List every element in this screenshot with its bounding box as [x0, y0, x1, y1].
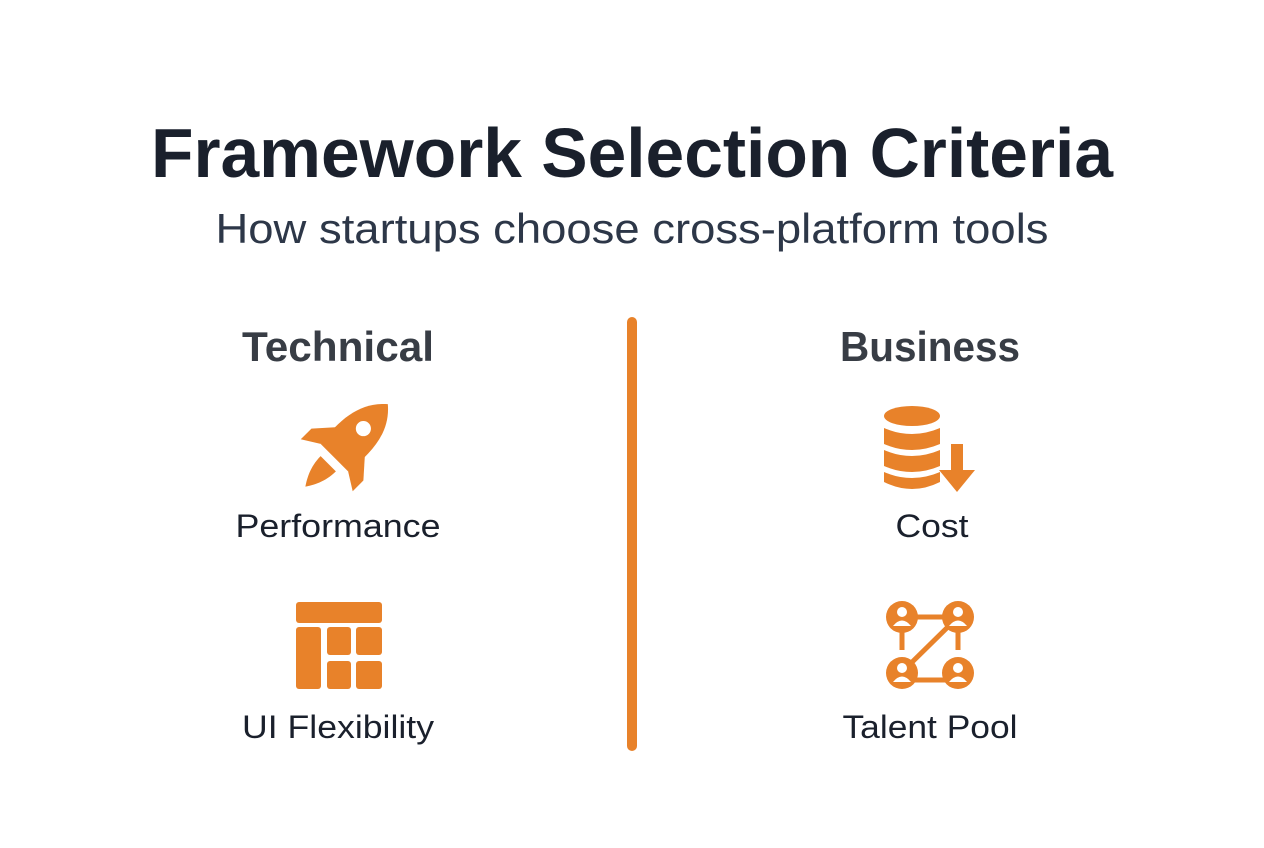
- label: Performance: Performance: [236, 508, 440, 544]
- heading: Business: Business: [840, 323, 1020, 370]
- icon: talent network: [886, 601, 974, 689]
- divider: [627, 322, 637, 746]
- icon: rocket: [279, 378, 414, 513]
- subtitle: How startups choose cross-platform tools: [216, 205, 1048, 252]
- label: Cost: Cost: [896, 508, 969, 544]
- label: UI Flexibility: UI Flexibility: [242, 709, 434, 745]
- title: Framework Selection Criteria: [151, 114, 1114, 192]
- label: Talent Pool: Talent Pool: [842, 709, 1018, 745]
- icon: coins with down arrow: [884, 406, 975, 492]
- heading: Technical: Technical: [242, 323, 434, 370]
- icon: grid layout: [296, 602, 382, 689]
